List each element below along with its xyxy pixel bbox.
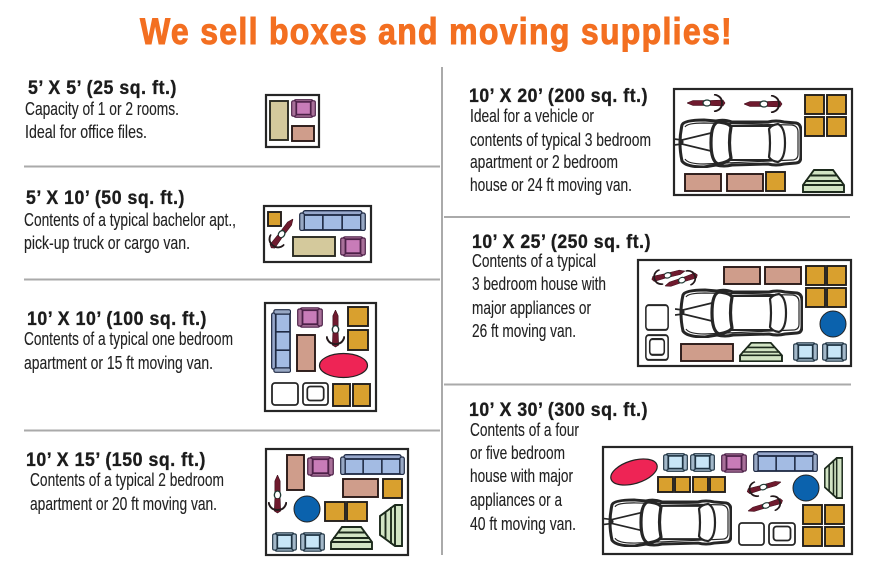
text: 10x20 description: house or 24 ft moving van. [470,175,632,195]
panel: 5x5 unit [25,78,319,147]
floor plan: 5x10 [264,206,371,262]
floor plan: 10x25 [638,260,851,366]
text: 10x10 description: Contents of a typical one bedroom [24,329,233,349]
left divider 2 [24,278,440,280]
vertical divider [441,67,443,555]
text: 10x30 description [470,420,579,534]
text: 10x30 description: or five bedroom [470,443,565,463]
text: 10x25 description: major appliances or [472,298,591,318]
text: 10x20 description: apartment or 2 bedroom [470,152,618,172]
heading: 10x20: 10’ X 20’ (200 sq. ft.) [469,86,648,107]
text: 10x30 description: 40 ft moving van. [470,514,576,534]
text: 10x20 description: Ideal for a vehicle or [470,106,594,126]
text: 5x5 description: Ideal for office files. [25,122,147,142]
heading: 10x15: 10’ X 15’ (150 sq. ft.) [26,450,206,471]
heading: 5x5: 5’ X 5’ (25 sq. ft.) [28,78,177,99]
floor plan: 10x10 [265,303,376,411]
text: 10x20 description: contents of typical 3 bedroom [470,130,651,150]
text: 10x15 description: Contents of a typical 2 bedroom [30,470,224,490]
panel: 10x20 unit [469,86,852,195]
panel: 10x30 unit [469,400,852,554]
text: 5x10 description: Contents of a typical bachelor apt., [24,210,236,230]
text: 10x25 description: 26 ft moving van. [472,321,576,341]
left divider 1 [24,166,440,168]
left divider 3 [24,430,440,432]
right divider 1 [444,216,850,218]
text: 10x25 description: 3 bedroom house with [472,274,606,294]
text: 10x15 description [30,470,224,514]
right divider 2 [444,384,851,386]
panel: 10x15 unit [26,449,408,555]
panel: 10x10 unit [24,303,376,411]
floor plan: 10x15 [266,449,408,555]
heading: 10x30: 10’ X 30’ (300 sq. ft.) [469,400,648,421]
text: 5x5 description: Capacity of 1 or 2 rooms. [25,99,179,119]
title: We sell boxes and moving supplies! [140,11,733,52]
floor plan: 10x20 [674,89,852,195]
heading: 10x10: 10’ X 10’ (100 sq. ft.) [27,309,207,330]
text: 5x10 description [24,210,236,253]
text: 10x30 description: house with major [470,466,573,486]
floor plan: 10x30 [603,447,852,554]
text: 10x10 description: apartment or 15 ft moving van. [24,353,213,373]
text: 10x25 description [472,251,606,341]
text: 5x5 description [25,99,179,142]
floor plan: 5x5 [266,95,319,147]
text: 10x25 description: Contents of a typical [472,251,596,271]
heading: 10x25: 10’ X 25’ (250 sq. ft.) [472,232,651,253]
text: 10x20 description [470,106,651,195]
panel: 5x10 unit [24,188,371,262]
heading: 5x10: 5’ X 10’ (50 sq. ft.) [26,188,185,209]
text: 10x15 description: apartment or 20 ft moving van. [30,494,217,514]
panel: 10x25 unit [472,232,851,366]
text: 10x30 description: appliances or a [470,490,563,510]
text: 10x10 description [24,329,233,373]
text: 10x30 description: Contents of a four [470,420,579,440]
text: 5x10 description: pick-up truck or cargo van. [24,233,190,253]
